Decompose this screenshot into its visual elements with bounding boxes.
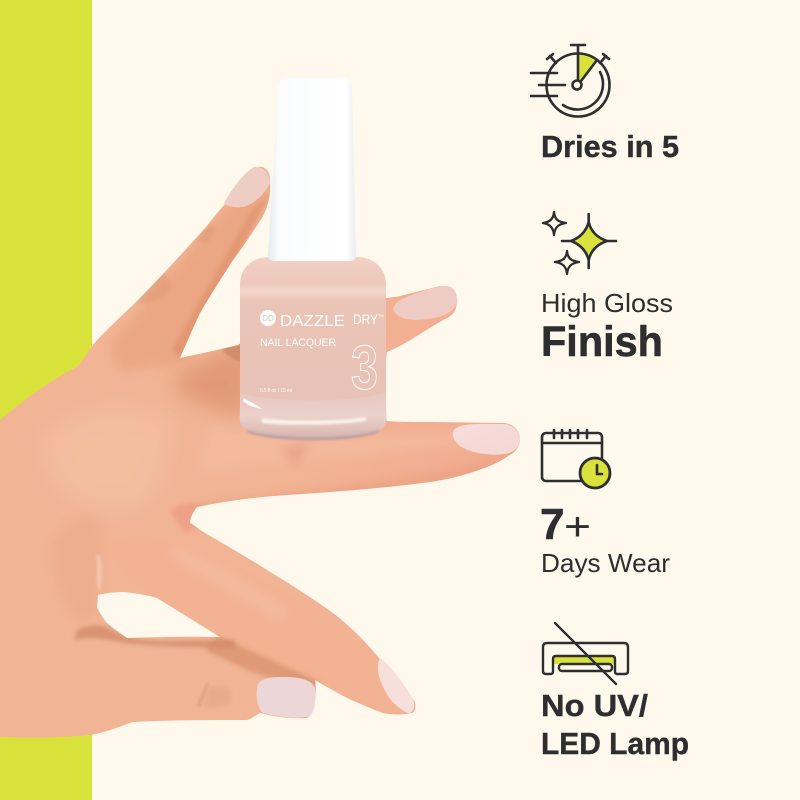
lower finger tone: [150, 596, 394, 714]
text: High Gloss: High Gloss: [541, 288, 673, 318]
brand logo mark: DD: [262, 314, 274, 323]
icon: stopwatch: [531, 45, 610, 116]
brand logo mark: [260, 310, 276, 326]
ring finger under tone: [202, 458, 505, 506]
icon: sparkles: [543, 212, 616, 274]
index finger tone: [110, 180, 272, 372]
product type: NAIL LACQUER: [260, 337, 336, 349]
base glass reflection left: [243, 398, 262, 409]
thumb web fold: [74, 626, 235, 648]
lower base edge: [246, 429, 380, 440]
index distal crease: [198, 226, 212, 241]
middle finger shadow under bottle: [170, 345, 250, 413]
nail: thumb: [257, 677, 315, 718]
index knuckle crease: [139, 274, 169, 304]
nail polish bottle: [240, 78, 386, 440]
middle finger fold: [222, 345, 242, 362]
brand name continued: DRY: [353, 311, 379, 327]
trademark: TM: [378, 313, 384, 318]
thumb knuckle pad: [208, 688, 229, 706]
palm mound crease: [96, 555, 102, 592]
base glass: [240, 392, 386, 440]
nail: middle finger: [393, 286, 457, 320]
thumb crease: [196, 684, 208, 707]
skin shading: [40, 180, 512, 715]
bottle cap: [268, 78, 356, 261]
icon: calendar with clock: [542, 430, 610, 488]
heading: LED Lamp: LED Lamp: [541, 726, 689, 761]
hand holding the bottle: [0, 167, 520, 738]
icon: crossed-out UV lamp: [543, 623, 628, 684]
thumb overlap shadow: [205, 636, 320, 690]
nail: index finger: [224, 167, 270, 207]
web shadow between fingers: [170, 503, 205, 534]
heading: 7+: +: [564, 505, 591, 549]
index right side shadow: [172, 195, 270, 358]
heading: 7+: 7: [540, 500, 564, 549]
base glass reflections: [262, 417, 366, 425]
heading: Finish: Finish: [541, 318, 663, 366]
heading: Dries in 5: Dries in 5: [541, 129, 679, 164]
palm mound: [97, 603, 98, 608]
volume: 0.5 fl oz / 15 ml: [260, 388, 292, 394]
bottle glass body: [240, 257, 386, 440]
text: Days Wear: Days Wear: [541, 548, 670, 578]
step number: 3: [351, 334, 378, 403]
back of hand highlight: [58, 421, 157, 497]
lower finger highlight: [184, 558, 270, 607]
heading: 7+: [540, 500, 591, 549]
brand name: DAZZLE: [280, 313, 345, 330]
bottle contact crease: [284, 444, 306, 462]
nail: lower finger: [378, 659, 414, 713]
heading: No UV/: No UV/: [541, 688, 648, 723]
hand silhouette: [0, 167, 520, 738]
green side band: [0, 0, 92, 800]
nail: ring finger: [453, 424, 520, 455]
ring finger upper tone: [265, 435, 456, 452]
